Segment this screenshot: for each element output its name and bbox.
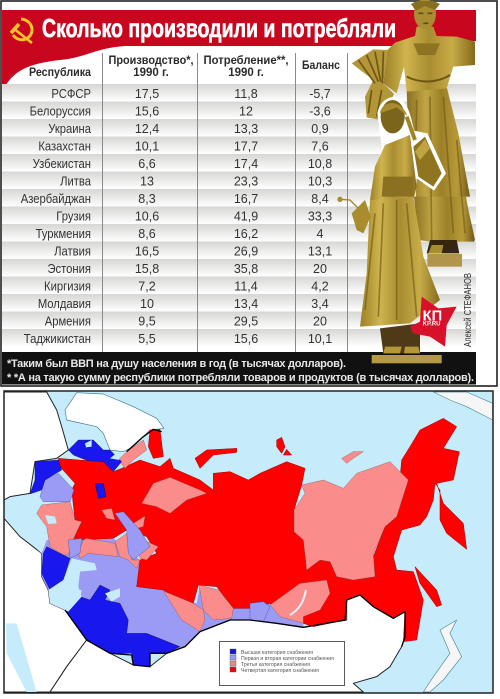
table column: consumption: 17,4	[234, 157, 258, 171]
table column: consumption: 15,6	[234, 332, 258, 346]
table column: republics: Украина	[48, 121, 91, 136]
footnotes	[2, 352, 476, 384]
table column: production: 5,5	[138, 332, 156, 346]
table header	[29, 55, 341, 79]
title: Сколько производили и потребляли	[42, 13, 396, 43]
table column: republics	[21, 86, 91, 346]
photo credit: Алексей СТЕФАНОВ	[462, 273, 474, 347]
icon: hammer and sickle	[11, 19, 32, 43]
table column: production: 17,5	[135, 87, 159, 101]
table header: Баланс	[302, 60, 341, 72]
table column: production: 9,5	[138, 314, 156, 328]
table column: balance: 10,1	[308, 332, 332, 346]
table column: republics: Туркмения	[36, 226, 91, 241]
base: southern republics	[42, 538, 303, 667]
table column: balance: 10,8	[308, 157, 332, 171]
table column: consumption: 16,7	[234, 192, 258, 206]
table column: republics: РСФСР	[51, 86, 91, 101]
map legend	[220, 642, 344, 686]
table column: consumption: 29,5	[234, 314, 258, 328]
table column: production: 13	[140, 174, 154, 188]
table column: consumption: 23,3	[234, 174, 258, 188]
table column: republics: Литва	[60, 174, 91, 189]
southern border	[65, 429, 405, 667]
Caspian Sea and lakes	[45, 440, 120, 612]
title banner	[2, 10, 476, 92]
table column: balance: -3,6	[309, 104, 331, 118]
highest category: dark blue regions	[30, 440, 180, 667]
table column: republics: Белоруссия	[30, 104, 91, 119]
table column: balance: 3,4	[311, 297, 329, 311]
statues	[337, 0, 475, 363]
table column: balance	[308, 87, 332, 346]
table column: production: 7,2	[138, 280, 156, 294]
KP logo: КП	[423, 309, 442, 325]
panel: table graphic	[1, 0, 497, 386]
table column: production: 10	[140, 297, 154, 311]
table column: republics: Азербайджан	[21, 191, 91, 206]
KP logo	[410, 297, 457, 347]
table column: consumption: 11,8	[234, 87, 258, 101]
map legend: Первая и вторая категории снабжения	[241, 656, 334, 662]
table column: balance: 0,9	[311, 122, 329, 136]
table column: consumption: 13,3	[234, 122, 258, 136]
table column: republics: Грузия	[56, 209, 91, 224]
table column: balance: 8,4	[311, 192, 329, 206]
table column: production: 8,6	[138, 227, 156, 241]
table header: Республика	[29, 67, 92, 79]
table stripes	[2, 84, 476, 346]
table column: balance: 10,3	[308, 174, 332, 188]
table column: consumption: 26,9	[234, 244, 258, 258]
table column: consumption: 17,7	[234, 140, 258, 154]
table column: republics: Латвия	[54, 244, 91, 259]
table column: production: 10,6	[135, 210, 159, 224]
table column: production: 8,3	[138, 192, 156, 206]
table column: production: 10,1	[135, 140, 159, 154]
table header: 1990 г.	[133, 67, 169, 79]
footnotes: *Таким был ВВП на душу населения в год (в тысячах долларов).	[7, 358, 346, 370]
table column: consumption	[234, 87, 258, 346]
table column: republics: Молдавия	[38, 296, 91, 311]
first and second category: light purple regions	[40, 473, 270, 622]
map legend: Четвертая категория снабжения	[241, 668, 319, 674]
table column: production	[135, 87, 159, 346]
front statue	[337, 97, 446, 363]
table column: production: 16,5	[135, 244, 159, 258]
KP logo: KP.RU	[423, 321, 441, 327]
footnotes: * *А на такую сумму республики потребляли товаров и продуктов (в тысячах долларов).	[7, 372, 474, 384]
table column: consumption: 12	[239, 104, 253, 118]
table column: balance: 20	[313, 262, 327, 276]
table column: republics: Узбекистан	[33, 156, 91, 171]
table column: production: 12,4	[135, 122, 159, 136]
table header: Потребление**,	[204, 55, 288, 67]
panel: map	[4, 391, 493, 693]
third category: pink regions	[37, 440, 408, 632]
table column: balance: 33,3	[308, 210, 332, 224]
lake Baikal	[290, 590, 306, 615]
back statue	[352, 0, 475, 267]
map legend: Третья категория снабжения	[241, 662, 310, 668]
table column: consumption: 35,8	[234, 262, 258, 276]
table column: republics: Казахстан	[38, 139, 91, 154]
table header: Производство*,	[108, 55, 194, 67]
table column: balance: 7,6	[311, 140, 329, 154]
table column: balance: 4,2	[311, 280, 329, 294]
table header: 1990 г.	[228, 67, 264, 79]
table column: republics: Таджикистан	[24, 331, 91, 346]
table column: consumption: 13,4	[234, 297, 258, 311]
surrounding land	[4, 392, 493, 692]
table column: consumption: 16,2	[234, 227, 258, 241]
table column: republics: Киргизия	[44, 279, 91, 294]
table column: consumption: 11,4	[234, 280, 258, 294]
table column: balance: -5,7	[309, 87, 331, 101]
table column: republics: Эстония	[47, 261, 91, 276]
table column: consumption: 41,9	[234, 210, 258, 224]
table column: balance: 4	[317, 227, 324, 241]
seas on land	[6, 496, 47, 692]
table column: production: 6,6	[138, 157, 156, 171]
table column: balance: 20	[313, 314, 327, 328]
fourth category: red regions	[58, 418, 467, 642]
table column: balance: 13,1	[308, 244, 332, 258]
table column: production: 15,6	[135, 104, 159, 118]
map legend: Высшая категория снабжения	[241, 650, 313, 656]
table column: production: 15,8	[135, 262, 159, 276]
table column: republics: Армения	[45, 314, 91, 329]
